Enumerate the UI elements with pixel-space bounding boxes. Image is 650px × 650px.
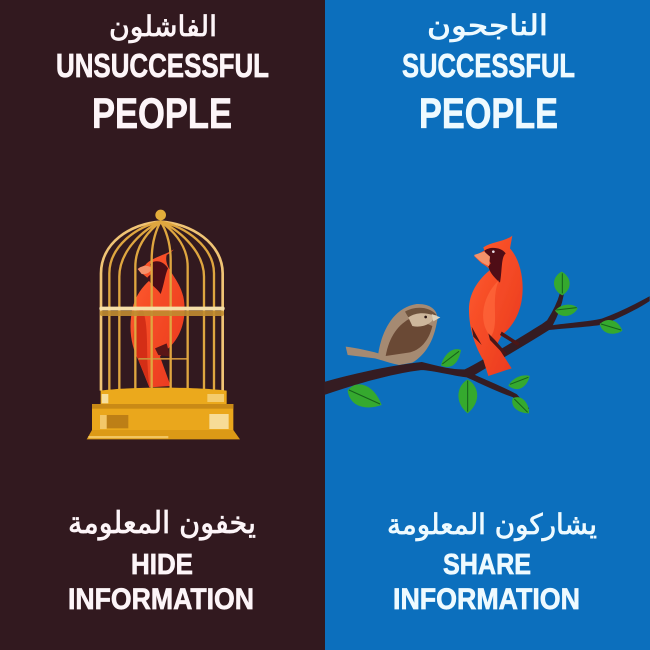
text line: INFORMATION: INFORMATION [68, 583, 254, 616]
icon: caged cardinal [130, 249, 188, 387]
heading line: PEOPLE: PEOPLE [92, 90, 232, 138]
heading: unsuccessful people [56, 10, 269, 138]
icon: cage finial ball [155, 210, 166, 220]
icon: leaves [348, 272, 622, 413]
icon: cardinal [469, 236, 523, 376]
text line: HIDE: HIDE [131, 549, 193, 581]
heading: successful people [402, 9, 575, 138]
heading line: PEOPLE right: PEOPLE [419, 90, 558, 138]
text line: SHARE: SHARE [443, 549, 531, 581]
panel: unsuccessful people background [0, 0, 325, 650]
arabic heading: unsuccessful: الفاشلون [109, 10, 217, 43]
arabic text: hide information: يخفون المعلومة [68, 506, 256, 541]
text block: share information [387, 508, 597, 616]
text line: INFORMATION right: INFORMATION [393, 583, 580, 616]
illustration: birds on a branch [325, 236, 649, 413]
text block: hide information [68, 506, 256, 616]
icon: branch [325, 294, 649, 410]
icon: cage ring band [99, 307, 225, 316]
heading line: UNSUCCESSFUL: UNSUCCESSFUL [56, 47, 269, 84]
icon: cage base [87, 388, 240, 439]
illustration: cardinal in golden cage [87, 210, 240, 439]
icon: sparrow [346, 304, 440, 365]
panel: successful people background [325, 0, 650, 650]
arabic heading: successful: الناجحون [427, 9, 548, 42]
arabic text: share information: يشاركون المعلومة [387, 508, 597, 541]
heading line: SUCCESSFUL: SUCCESSFUL [402, 47, 575, 84]
icon: cage bars [101, 222, 223, 391]
